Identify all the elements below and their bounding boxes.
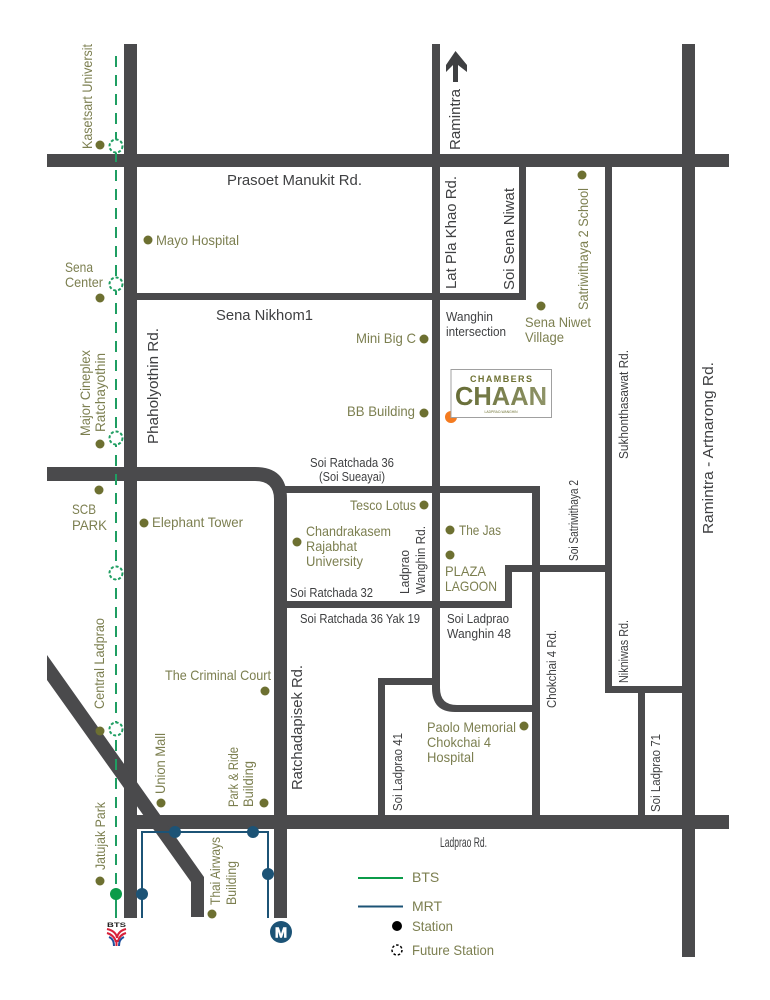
road labels: Soi Sena Niwat xyxy=(501,187,518,290)
landmarks: Sena xyxy=(65,259,93,275)
road labels: Ladprao Rd. xyxy=(440,834,487,850)
road labels: Soi Ladprao 71 xyxy=(648,734,663,812)
icon: BTS logo xyxy=(107,923,126,946)
road labels: Sukhonthasawat Rd. xyxy=(616,350,631,459)
landmarks: Elephant Tower xyxy=(152,514,243,530)
landmarks: Chokchai 4 xyxy=(427,734,491,750)
road labels: Soi Ratchada 36 Yak 19 xyxy=(300,611,420,626)
landmarks xyxy=(65,44,591,918)
landmarks: Village xyxy=(525,329,564,345)
landmarks: Rajabhat xyxy=(306,538,357,554)
landmarks: Major Cineplex xyxy=(77,350,93,436)
road labels: Nikniwas Rd. xyxy=(616,620,631,683)
road labels: Wanghin 48 xyxy=(447,626,511,641)
road labels: intersection xyxy=(446,324,506,339)
logo: Chambers Chaan xyxy=(451,370,552,418)
landmarks: LAGOON xyxy=(445,578,497,594)
landmarks: Park & Ride xyxy=(225,747,241,807)
logo: Chambers Chaan: CHAMBERS xyxy=(470,374,532,384)
legend: BTS xyxy=(412,869,439,885)
landmarks: Sena Niwet xyxy=(525,314,591,330)
road labels: Ratchadapisek Rd. xyxy=(289,665,306,790)
landmarks: Mini Big C xyxy=(356,330,416,346)
road labels: Soi Satriwithaya 2 xyxy=(566,480,581,561)
icon: MRT logo xyxy=(270,921,292,943)
landmarks: Paolo Memorial xyxy=(427,719,516,735)
logo: Chambers Chaan: LADPRAO-WANGHIN xyxy=(484,409,518,414)
landmarks: PLAZA xyxy=(445,563,487,579)
legend: MRT xyxy=(412,898,443,914)
arrow: north xyxy=(446,51,467,82)
road labels: Soi Ladprao xyxy=(447,611,509,626)
road labels: Prasoet Manukit Rd. xyxy=(227,172,362,189)
landmarks: Union Mall xyxy=(152,733,168,794)
landmarks: Tesco Lotus xyxy=(350,497,416,513)
road labels: (Soi Sueayai) xyxy=(319,469,385,484)
landmarks: Chandrakasem xyxy=(306,523,391,539)
legend xyxy=(358,869,494,958)
landmarks: Jatujak Park xyxy=(92,801,108,870)
road labels xyxy=(145,88,717,850)
project location marker xyxy=(445,411,457,423)
landmarks: Thai Airways xyxy=(207,837,223,905)
BTS line xyxy=(110,56,122,918)
road labels: Soi Ratchada 36 xyxy=(310,455,394,470)
road labels: Sena Nikhom1 xyxy=(216,307,313,324)
road labels: Phaholyothin Rd. xyxy=(145,328,162,444)
landmarks: University xyxy=(306,553,363,569)
landmarks: Building xyxy=(223,861,239,905)
landmarks: Mayo Hospital xyxy=(156,232,239,248)
landmarks: Central Ladprao xyxy=(91,618,107,709)
road labels: Ladprao xyxy=(397,550,412,594)
road labels: Wanghin Rd. xyxy=(413,526,428,594)
road labels: Ramintra - Artnarong Rd. xyxy=(700,362,717,534)
landmarks: Kasetsart Universit xyxy=(79,44,95,149)
landmarks: The Jas xyxy=(459,522,501,538)
icon: BTS logo: BTS xyxy=(107,923,126,929)
landmarks: Center xyxy=(65,274,103,290)
landmarks: Building xyxy=(240,761,256,807)
landmarks: Ratchayothin xyxy=(92,353,108,432)
landmarks: Hospital xyxy=(427,749,474,765)
legend: Station xyxy=(412,918,453,934)
road labels: Lat Pla Khao Rd. xyxy=(443,176,460,289)
legend: Future Station xyxy=(412,942,494,958)
landmarks: SCB xyxy=(72,501,96,517)
landmarks: Satriwithaya 2 School xyxy=(575,188,591,310)
MRT line xyxy=(136,826,274,918)
landmarks: The Criminal Court xyxy=(165,667,271,683)
road labels: Soi Ladprao 41 xyxy=(390,733,405,811)
landmarks: PARK xyxy=(72,517,108,533)
landmarks: BB Building xyxy=(347,403,415,419)
logo: Chambers Chaan: CHAAN xyxy=(455,381,547,411)
road labels: Ramintra xyxy=(447,88,464,150)
road labels: Chokchai 4 Rd. xyxy=(544,630,559,708)
icon: MRT logo: M xyxy=(275,924,287,942)
road labels: Wanghin xyxy=(446,309,493,324)
road labels: Soi Ratchada 32 xyxy=(290,585,373,600)
